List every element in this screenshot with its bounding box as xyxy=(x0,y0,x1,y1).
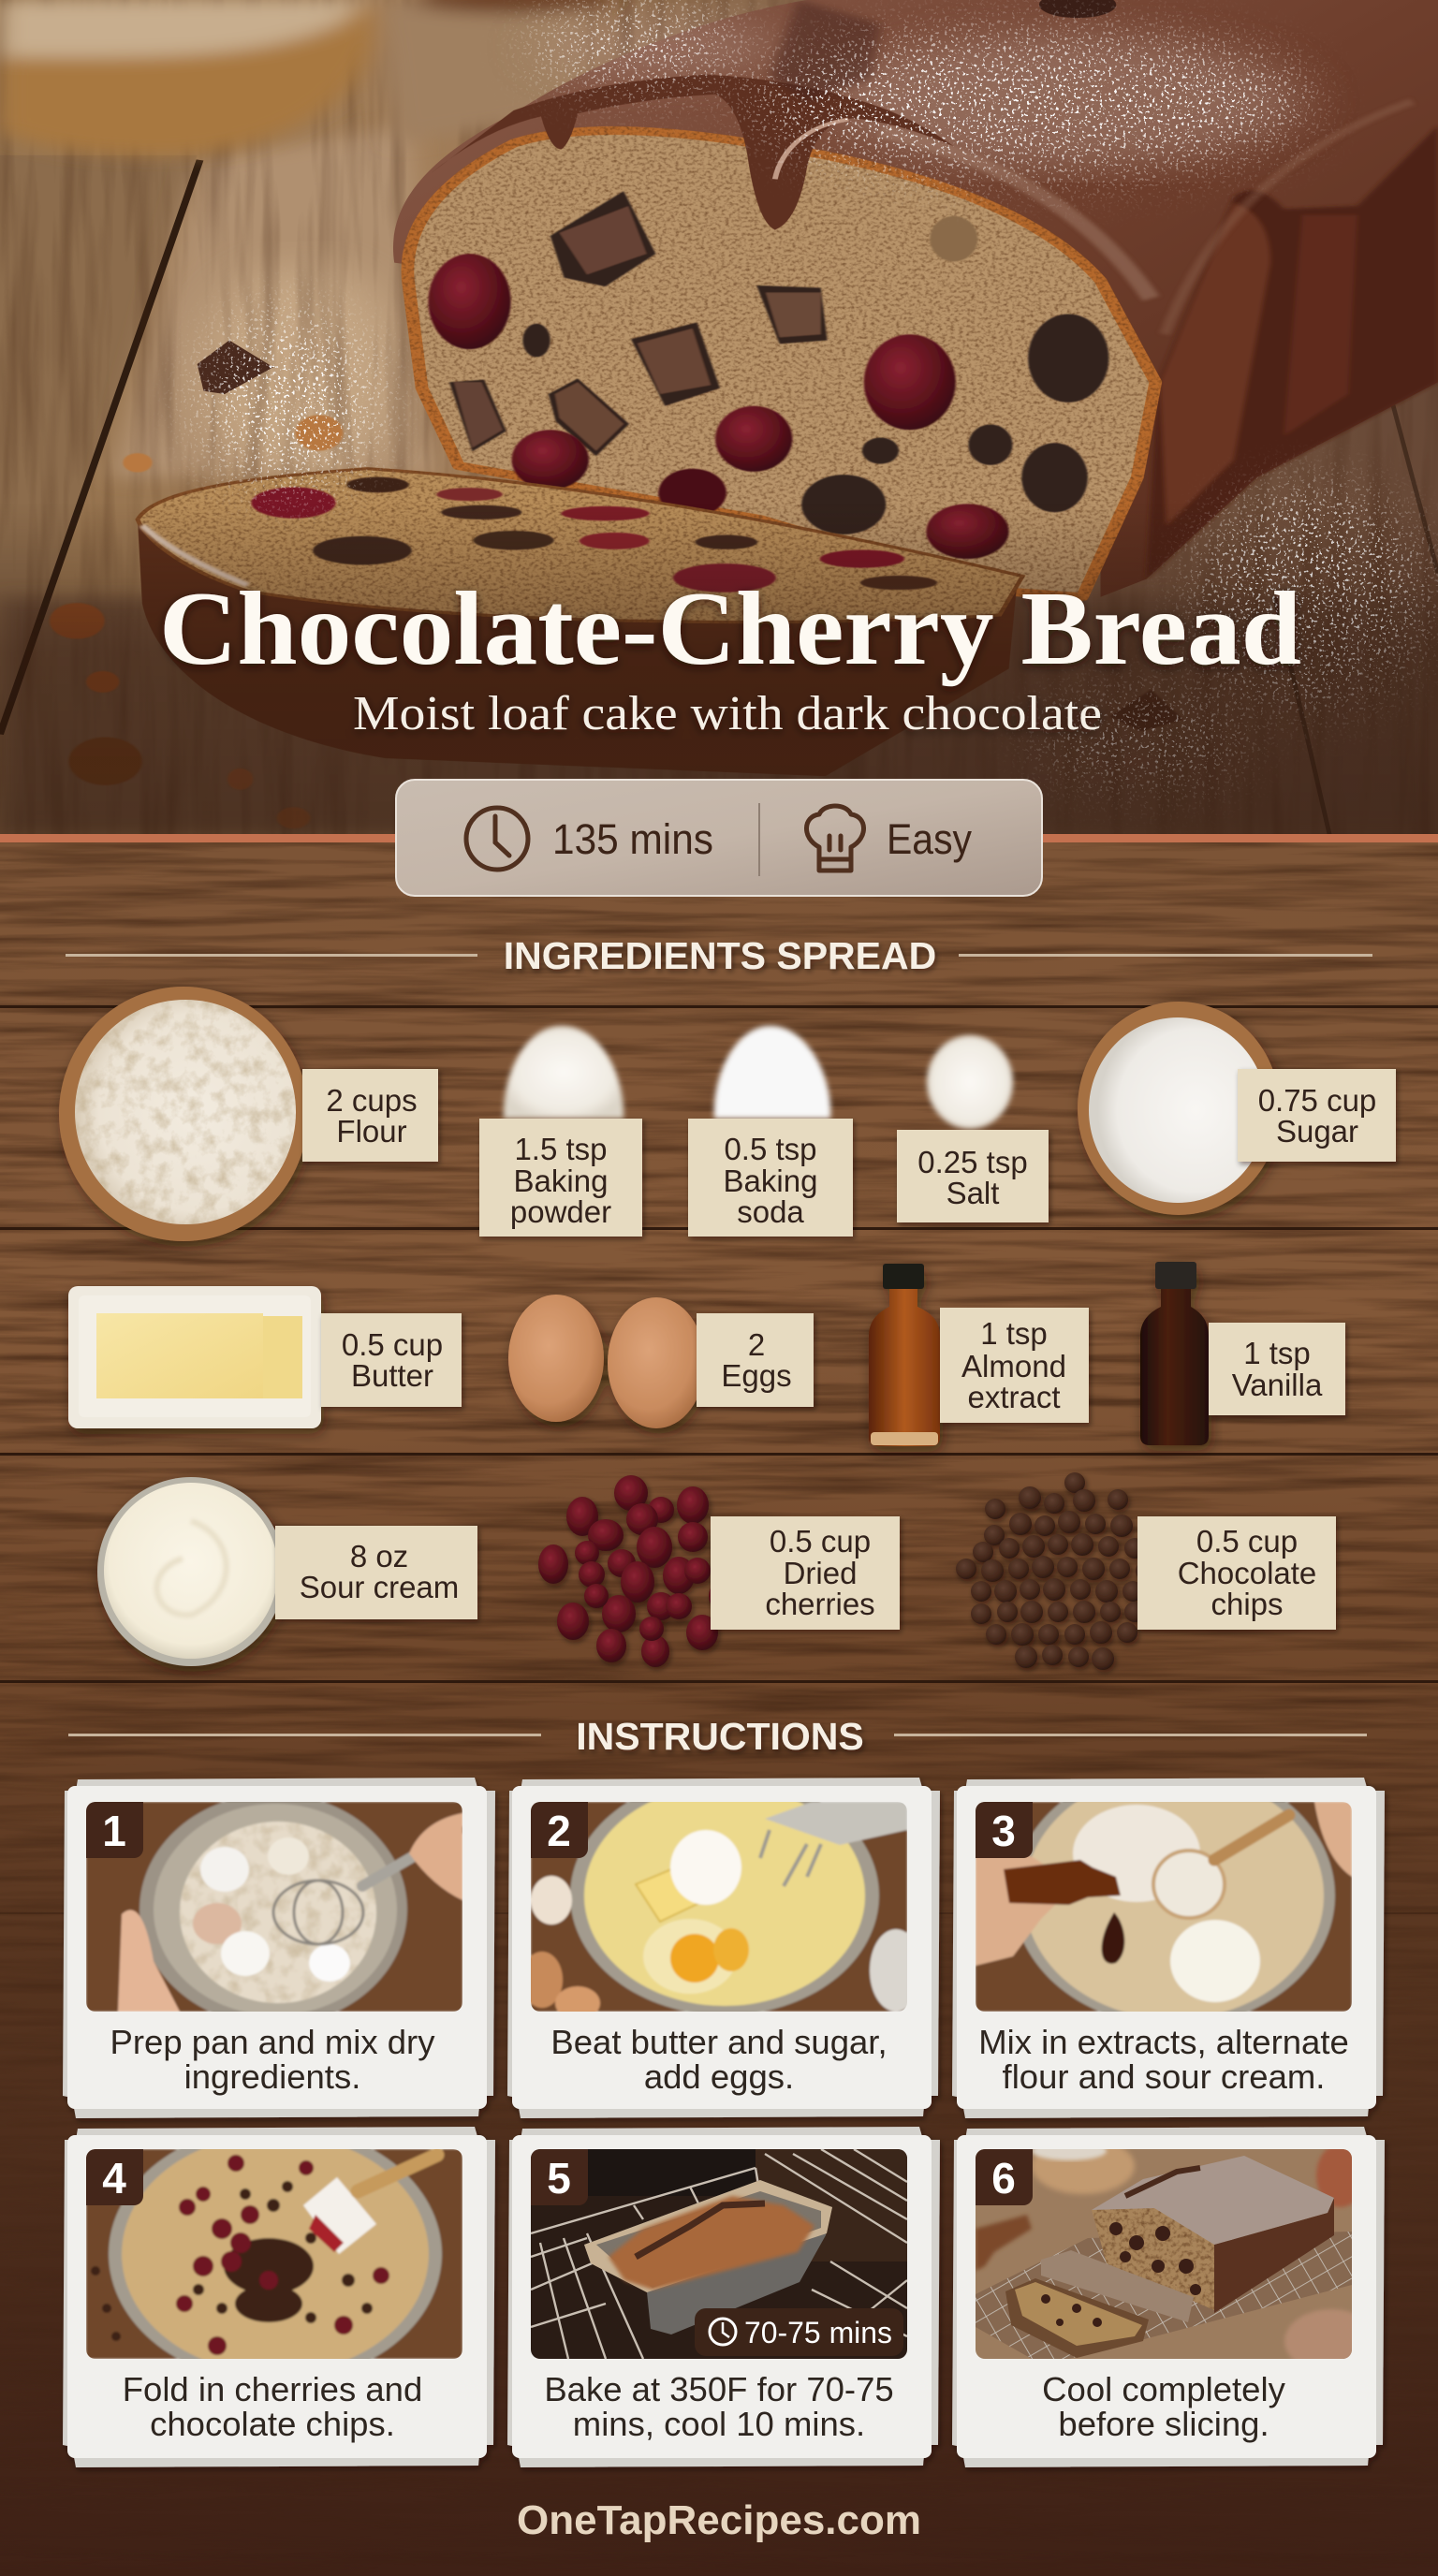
badge 5: 5 xyxy=(547,2154,571,2203)
almond extract label xyxy=(940,1308,1089,1423)
ingredient: sugar xyxy=(1078,1002,1396,1215)
caption 4: chocolate chips. xyxy=(150,2405,395,2443)
badge 6 xyxy=(976,2149,1033,2205)
flour label: Flour xyxy=(336,1114,407,1149)
info pill: time and difficulty xyxy=(396,780,1042,896)
ingredient: vanilla xyxy=(1140,1262,1345,1445)
title: Chocolate-Cherry Bread xyxy=(159,571,1301,687)
almond extract label: extract xyxy=(967,1380,1061,1414)
time text: 135 mins xyxy=(552,815,713,863)
step 3 photo xyxy=(976,1802,1352,2012)
time badge xyxy=(695,2308,903,2356)
time badge: 70-75 mins xyxy=(744,2316,892,2349)
orange divider band xyxy=(0,834,1438,842)
hero: wood grain xyxy=(0,0,1438,838)
badge 1: 1 xyxy=(102,1807,126,1855)
loaf: crumb face xyxy=(407,130,1155,597)
ingredient: sour cream xyxy=(97,1477,477,1666)
badge 3 xyxy=(976,1802,1033,1858)
ingredient: baking powder xyxy=(479,1026,642,1237)
step 5 photo xyxy=(531,2149,907,2359)
ingredient: chocolate chips xyxy=(956,1472,1336,1670)
loaf: side wall xyxy=(1146,125,1438,579)
slice: side crust xyxy=(138,520,1018,776)
slice: highlight xyxy=(142,525,247,585)
salt label xyxy=(897,1130,1049,1222)
caption 2: Beat butter and sugar, xyxy=(550,2023,888,2061)
step card 4 xyxy=(63,2125,495,2467)
almond extract bottle xyxy=(869,1264,940,1446)
sour cream label: 8 oz xyxy=(350,1539,408,1573)
lower wooden background xyxy=(0,836,1438,2576)
loaf: glossy band xyxy=(880,101,1413,334)
caption 4 xyxy=(123,2370,422,2443)
badge 2: 2 xyxy=(547,1807,571,1855)
almond extract label: 1 tsp xyxy=(980,1316,1048,1351)
eggs label xyxy=(697,1313,814,1407)
loaf: sugar dusting tint xyxy=(541,18,1302,168)
ingredient: almond extract xyxy=(869,1264,1089,1446)
step 1 photo xyxy=(86,1802,462,2012)
loaf pan xyxy=(584,2180,832,2334)
powder mound xyxy=(504,1026,624,1119)
vanilla bottle xyxy=(1140,1262,1209,1445)
chocolate chunk on table xyxy=(198,341,273,394)
icon: clock xyxy=(466,808,528,870)
step card 6 xyxy=(952,2127,1385,2467)
chocolate chips label xyxy=(1137,1516,1336,1630)
flour label xyxy=(302,1069,438,1162)
salt label: 0.25 tsp xyxy=(917,1145,1028,1179)
caption 1 xyxy=(110,2023,435,2096)
heading: instructions xyxy=(68,1715,1367,1758)
chip pile xyxy=(956,1472,1169,1670)
sour cream bowl xyxy=(97,1477,285,1666)
vanilla label: 1 tsp xyxy=(1243,1336,1311,1370)
ingredient: baking soda xyxy=(688,1026,853,1237)
sour cream label: Sour cream xyxy=(300,1570,459,1604)
caption 3: flour and sour cream. xyxy=(1003,2057,1325,2096)
baking soda label: Baking xyxy=(724,1164,817,1198)
footer brand: OneTapRecipes.com xyxy=(517,2497,921,2543)
bread slices xyxy=(1005,2250,1194,2358)
heading: ingredients spread: INGREDIENTS SPREAD xyxy=(504,934,936,977)
caption 1: Prep pan and mix dry xyxy=(110,2023,435,2061)
caption 4: Fold in cherries and xyxy=(123,2370,422,2408)
step 2 photo xyxy=(531,1802,907,2012)
soda mound xyxy=(714,1026,830,1119)
dried cherries label xyxy=(711,1516,900,1630)
slice: top face xyxy=(138,469,1022,622)
vanilla label xyxy=(1209,1323,1345,1415)
hero photo: loaf on wooden table xyxy=(0,0,1438,838)
badge 6: 6 xyxy=(991,2154,1016,2203)
icon: chef hat xyxy=(806,806,864,871)
step card 5 xyxy=(507,2127,940,2467)
flour bowl xyxy=(59,987,308,1241)
caption 5: Bake at 350F for 70-75 xyxy=(544,2370,894,2408)
heading: instructions: INSTRUCTIONS xyxy=(576,1715,864,1758)
baking powder label xyxy=(479,1119,642,1237)
caption 2: add eggs. xyxy=(644,2057,794,2096)
sugar label: Sugar xyxy=(1276,1114,1358,1149)
baking soda label: 0.5 tsp xyxy=(724,1132,817,1166)
badge 5 xyxy=(531,2149,588,2205)
caption 3: Mix in extracts, alternate xyxy=(978,2023,1349,2061)
loaf: glaze drips xyxy=(431,0,1116,230)
ingredient: dried cherries xyxy=(538,1475,900,1667)
caption 2 xyxy=(550,2023,888,2096)
difficulty text: Easy xyxy=(887,815,972,863)
badge 4: 4 xyxy=(102,2154,126,2203)
salt mound xyxy=(927,1035,1013,1129)
hero: blurred bowl top left xyxy=(0,0,614,155)
step card 2 xyxy=(507,1776,940,2118)
baking soda label: soda xyxy=(737,1194,804,1229)
chocolate chips label: 0.5 cup xyxy=(1196,1524,1298,1559)
baking powder label: Baking xyxy=(514,1164,608,1198)
powdered sugar dusting xyxy=(167,0,1438,814)
dried cherries label: Dried xyxy=(784,1556,857,1590)
baking powder label: powder xyxy=(510,1194,611,1229)
flour label: 2 cups xyxy=(326,1083,418,1118)
step 4 photo xyxy=(86,2149,462,2359)
chocolate chips label: chips xyxy=(1211,1587,1284,1621)
cooling loaf xyxy=(1092,2156,1334,2313)
ingredient: eggs xyxy=(508,1295,814,1428)
slice: inclusions xyxy=(251,477,937,593)
loaf: dark chips xyxy=(522,216,1108,534)
butter dish xyxy=(68,1286,321,1428)
sugar label xyxy=(1238,1069,1396,1162)
caption 5 xyxy=(544,2370,894,2443)
baking powder label: 1.5 tsp xyxy=(514,1132,608,1166)
step card 1 xyxy=(63,1778,495,2118)
eggs label: 2 xyxy=(748,1327,765,1362)
badge 1 xyxy=(86,1802,143,1858)
ingredient: salt xyxy=(897,1035,1049,1222)
loaf: chocolate chunks xyxy=(449,191,828,456)
heading: ingredients spread xyxy=(66,934,1372,977)
eggs label: Eggs xyxy=(721,1358,792,1393)
loaf: glazed top xyxy=(393,0,1438,597)
caption 6 xyxy=(1042,2370,1286,2443)
sour cream label xyxy=(275,1526,477,1619)
vanilla label: Vanilla xyxy=(1232,1368,1323,1402)
ingredient: butter xyxy=(68,1286,462,1428)
two eggs xyxy=(508,1295,705,1428)
dried cherries label: 0.5 cup xyxy=(770,1524,871,1559)
pill divider xyxy=(758,803,760,876)
hero: table planks xyxy=(0,125,1438,836)
loaf: cherries xyxy=(428,254,1009,559)
salt label: Salt xyxy=(946,1176,999,1210)
badge 3: 3 xyxy=(991,1807,1016,1855)
caption 6: Cool completely xyxy=(1042,2370,1286,2408)
step 6 photo xyxy=(976,2138,1378,2373)
sugar label: 0.75 cup xyxy=(1258,1083,1376,1118)
hero: bottom shade xyxy=(0,0,1438,838)
subtitle: Moist loaf cake with dark chocolate xyxy=(353,687,1102,740)
step card 3 xyxy=(952,1764,1385,2118)
dried cherries label: cherries xyxy=(765,1587,875,1621)
butter label: Butter xyxy=(351,1358,433,1393)
badge 2 xyxy=(531,1802,588,1858)
caption 6: before slicing. xyxy=(1058,2405,1269,2443)
caption 1: ingredients. xyxy=(184,2057,360,2096)
caption 3 xyxy=(978,2023,1349,2096)
chocolate chips label: Chocolate xyxy=(1178,1556,1316,1590)
baking soda label xyxy=(688,1119,853,1237)
caption 5: mins, cool 10 mins. xyxy=(573,2405,865,2443)
butter label xyxy=(321,1313,462,1407)
badge 4 xyxy=(86,2149,143,2205)
cherry pile xyxy=(538,1475,741,1667)
butter label: 0.5 cup xyxy=(342,1327,443,1362)
ingredient: flour xyxy=(59,987,438,1241)
sugar bowl xyxy=(1078,1002,1280,1215)
almond extract label: Almond xyxy=(961,1349,1066,1383)
crumbs on table xyxy=(50,415,1183,828)
